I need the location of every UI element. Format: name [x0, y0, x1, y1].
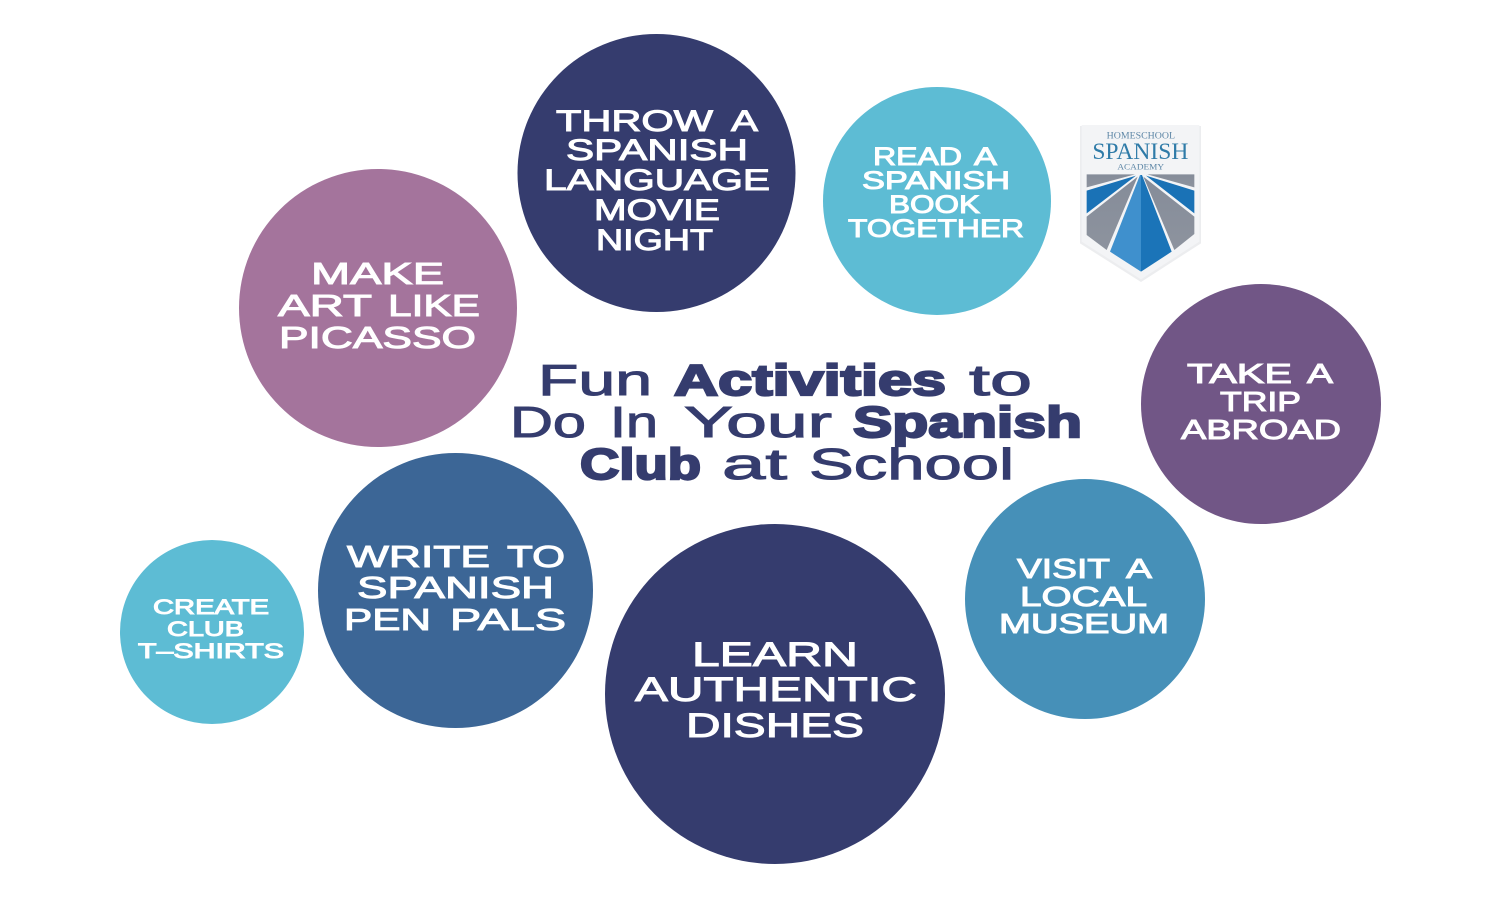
bubble: pen pals: TO [507, 539, 565, 574]
bubble: pen pals [318, 453, 593, 728]
title: Fun [538, 356, 652, 405]
bubble: visit a museum: MUSEUM [999, 608, 1169, 639]
bubble: visit a museum: LOCAL [1020, 581, 1147, 612]
bubble: make art: ART [278, 288, 372, 323]
bubble: take a trip: A [1307, 358, 1333, 389]
title: In [610, 398, 658, 447]
bubble: learn dishes: DISHES [686, 707, 864, 745]
bubble: read a book [823, 87, 1051, 315]
bubble: movie night: THROW [556, 105, 714, 138]
bubble: club t-shirts: T–SHIRTS [138, 640, 284, 663]
bubble: learn dishes: AUTHENTIC [635, 671, 917, 709]
title: at [722, 440, 787, 489]
bubble: take a trip: ABROAD [1181, 414, 1341, 445]
bubble: movie night: LANGUAGE [544, 164, 770, 197]
bubble: take a trip: TAKE [1187, 358, 1292, 389]
title: School [809, 440, 1014, 489]
title: Spanish [853, 398, 1082, 447]
logo: Homeschool Spanish Academy shield: HOMESCHOOL [1107, 131, 1175, 141]
bubble: movie night: MOVIE [594, 194, 720, 227]
title [510, 356, 1082, 489]
bubble: learn dishes [605, 524, 945, 864]
logo: Homeschool Spanish Academy shield [1080, 125, 1201, 282]
bubble: pen pals: PALS [450, 602, 566, 637]
bubble: movie night: SPANISH [566, 134, 748, 167]
bubble: movie night: A [731, 105, 758, 138]
bubble: read a book: BOOK [889, 191, 980, 219]
bubble: visit a museum [965, 479, 1205, 719]
bubble: take a trip [1141, 284, 1381, 524]
title: Club [580, 440, 701, 489]
title: to [969, 356, 1032, 405]
bubble: learn dishes: LEARN [692, 636, 858, 674]
logo: Homeschool Spanish Academy shield: SPANISH [1092, 139, 1188, 165]
bubble: club t-shirts: CREATE [153, 596, 269, 619]
bubble: take a trip: TRIP [1220, 386, 1301, 417]
title: Your [684, 398, 832, 447]
logo: Homeschool Spanish Academy shield: ACADEMY [1117, 162, 1164, 171]
bubble: pen pals: WRITE [347, 539, 490, 574]
bubble: pen pals: PEN [344, 602, 431, 637]
bubble: read a book: A [974, 143, 997, 171]
bubble: pen pals: SPANISH [357, 570, 554, 605]
bubble: visit a museum: VISIT [1017, 553, 1110, 584]
bubble: read a book: READ [873, 143, 962, 171]
bubble: make art [239, 169, 517, 447]
title: Activities [674, 356, 946, 405]
bubble: make art: PICASSO [279, 320, 476, 355]
bubble: read a book: TOGETHER [848, 215, 1024, 243]
bubble: visit a museum: A [1126, 553, 1152, 584]
title: Do [510, 398, 586, 447]
bubble: movie night: NIGHT [596, 224, 713, 257]
bubble: make art: MAKE [311, 256, 444, 291]
bubble: movie night [518, 34, 796, 312]
bubble: club t-shirts: CLUB [167, 618, 244, 641]
bubble: read a book: SPANISH [862, 167, 1010, 195]
bubble: make art: LIKE [388, 288, 480, 323]
bubble: club t-shirts [120, 540, 304, 724]
